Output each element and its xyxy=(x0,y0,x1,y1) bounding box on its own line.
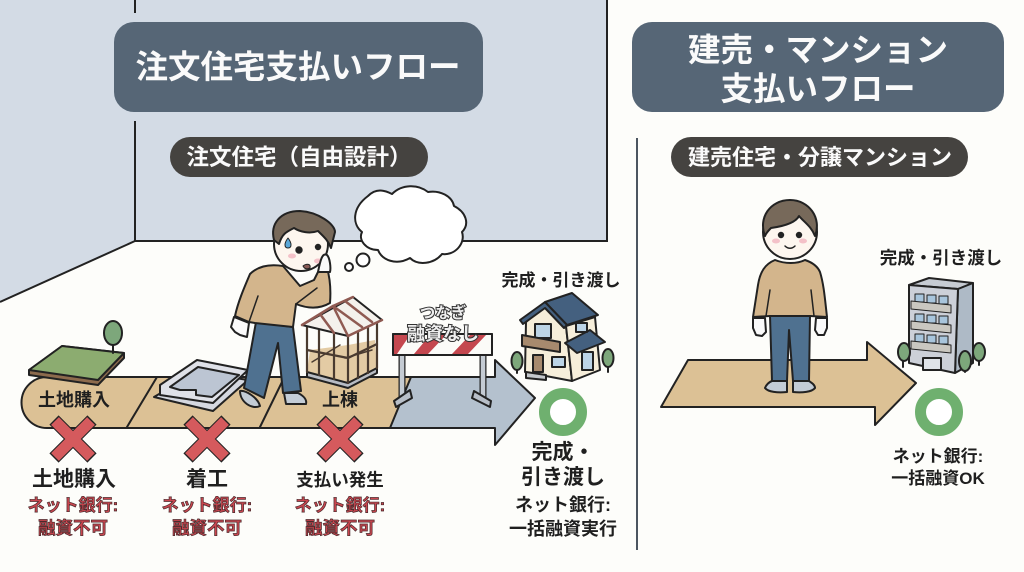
shoes xyxy=(240,391,260,407)
result: lump-sum at completion: 完成・ xyxy=(532,440,594,464)
result: lump-sum ok: ネット銀行: xyxy=(893,447,983,466)
subheading: custom home xyxy=(170,137,428,177)
result: lump-sum at completion xyxy=(509,440,617,539)
icon: house framing xyxy=(302,297,382,388)
arrow: no bridge loan section xyxy=(390,360,535,445)
thought bubble xyxy=(345,186,466,271)
heading: ready-built and condo flow: 支払いフロー xyxy=(720,71,916,107)
icon: foundation xyxy=(154,360,248,411)
step: framing, payment due xyxy=(295,390,385,538)
step: framing, payment due: 支払い発生 xyxy=(296,470,384,490)
icon: apartment building xyxy=(898,278,985,373)
sweater xyxy=(753,260,827,317)
subheading: ready-built and condo xyxy=(671,137,968,177)
person: happy xyxy=(753,200,827,392)
head xyxy=(274,217,328,271)
heading: ready-built and condo flow: 建売・マンション xyxy=(688,32,948,68)
step: construction start: 着工 xyxy=(186,468,228,491)
flow path: custom home xyxy=(22,360,535,445)
result: lump-sum ok xyxy=(891,447,985,488)
step: construction start xyxy=(162,420,252,538)
head xyxy=(763,205,817,259)
icon: ok circle condo xyxy=(920,394,958,430)
sweat drop xyxy=(285,238,291,248)
subheading: ready-built and condo: 建売住宅・分譲マンション xyxy=(688,145,952,170)
arrow: ready-built flow xyxy=(661,342,916,425)
step: land purchase: 土地購入 xyxy=(38,390,110,410)
step: construction start: ネット銀行: xyxy=(162,496,252,515)
result: lump-sum at completion: ネット銀行: xyxy=(515,495,611,515)
result: lump-sum at completion: 一括融資実行 xyxy=(509,519,617,539)
subheading: custom home: 注文住宅（自由設計） xyxy=(186,145,412,170)
hand on cheek xyxy=(318,254,330,272)
icon: detached house xyxy=(512,293,614,381)
label: completion and handover: 完成・引き渡し xyxy=(502,270,620,290)
barricade label: 融資なし xyxy=(407,324,479,344)
sweater xyxy=(235,265,330,327)
heading: custom home flow xyxy=(114,22,483,112)
shoes xyxy=(765,381,787,392)
label: completion and handover, condo: 完成・引き渡し xyxy=(880,248,1002,268)
step: land purchase: 融資不可 xyxy=(38,518,108,538)
icon: land plot xyxy=(29,321,124,385)
step: framing, payment due: 上棟 xyxy=(322,390,358,410)
hands xyxy=(753,318,766,336)
barricade label: つなぎ xyxy=(420,303,466,322)
icon: ok circle custom xyxy=(544,394,582,430)
step: land purchase: ネット銀行: xyxy=(28,496,118,515)
step: framing, payment due: 融資不可 xyxy=(305,518,375,538)
jeans xyxy=(244,322,301,398)
hand xyxy=(231,317,249,337)
person: worried xyxy=(231,211,335,407)
step: land purchase: 土地購入 xyxy=(32,468,116,491)
panel divider xyxy=(636,138,638,550)
barricade xyxy=(393,334,492,407)
heading: ready-built and condo flow xyxy=(632,22,1004,112)
result: lump-sum ok: 一括融資OK xyxy=(891,469,985,488)
jeans xyxy=(770,316,810,381)
step: framing, payment due: ネット銀行: xyxy=(295,496,385,515)
step: land purchase xyxy=(28,390,118,538)
heading: custom home flow: 注文住宅支払いフロー xyxy=(135,49,461,85)
barricade label xyxy=(407,303,479,344)
result: lump-sum at completion: 引き渡し xyxy=(521,466,605,489)
step: construction start: 融資不可 xyxy=(172,518,242,538)
